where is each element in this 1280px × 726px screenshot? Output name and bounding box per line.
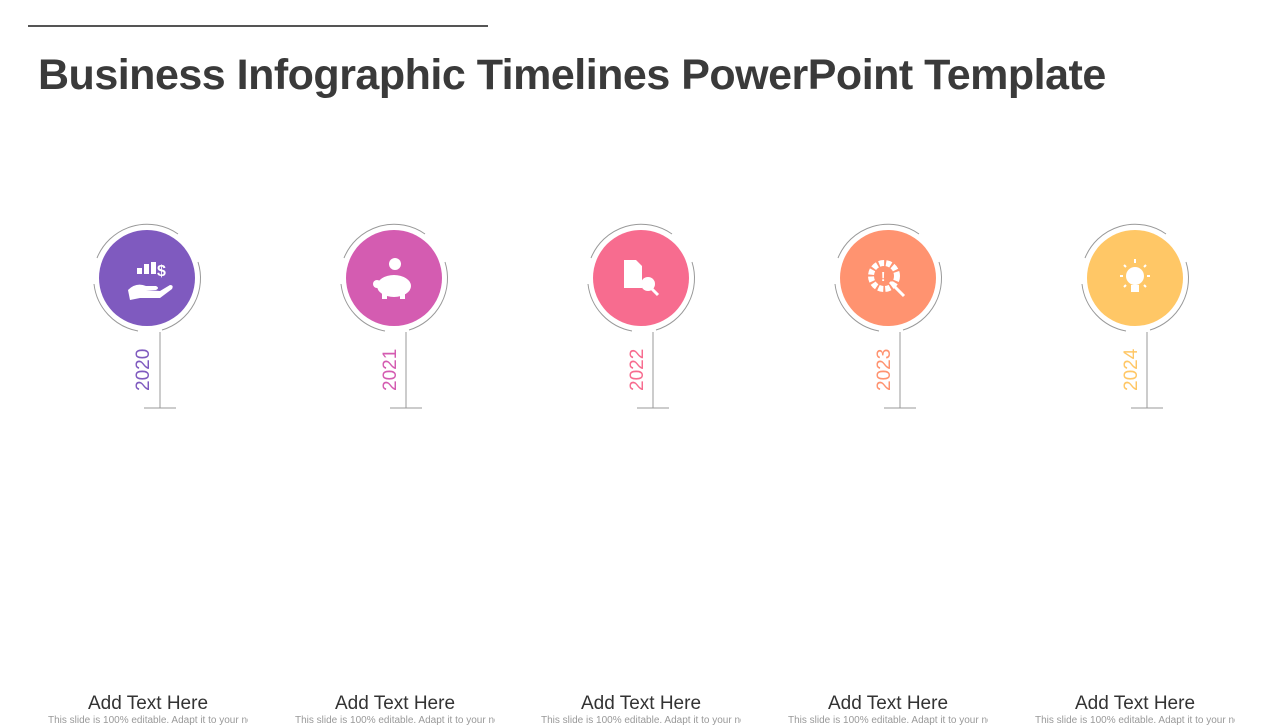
milestone 2020 [94, 224, 201, 408]
milestone 2023: 2023 [874, 349, 895, 391]
icon: hand with growth: $ [157, 263, 166, 280]
milestone 2024 [1082, 224, 1189, 408]
text block 1: Add Text Here [88, 693, 208, 714]
text block 5: Add Text Here [1075, 693, 1195, 714]
text block 4: Add Text Here [828, 693, 948, 714]
title: Business Infographic Timelines PowerPoint Template [38, 51, 1106, 99]
icon: gear wrench [871, 263, 904, 296]
milestone 2021 [341, 224, 448, 408]
milestone 2022: 2022 [627, 349, 648, 391]
icon: bulb [1120, 259, 1150, 292]
icon: hand with growth [128, 262, 173, 300]
milestone 2024: 2024 [1121, 348, 1142, 391]
milestone 2020: 2020 [133, 349, 154, 391]
milestone 2021: 2021 [380, 349, 401, 391]
milestone 2023 [835, 224, 942, 408]
icon: document search [624, 260, 658, 295]
text block 2: Add Text Here [335, 693, 455, 714]
icon: gear wrench: ! [881, 269, 885, 284]
text block 3: Add Text Here [581, 693, 701, 714]
top rule [28, 25, 488, 27]
icon: piggy bank [373, 258, 411, 299]
milestone 2022 [588, 224, 695, 408]
